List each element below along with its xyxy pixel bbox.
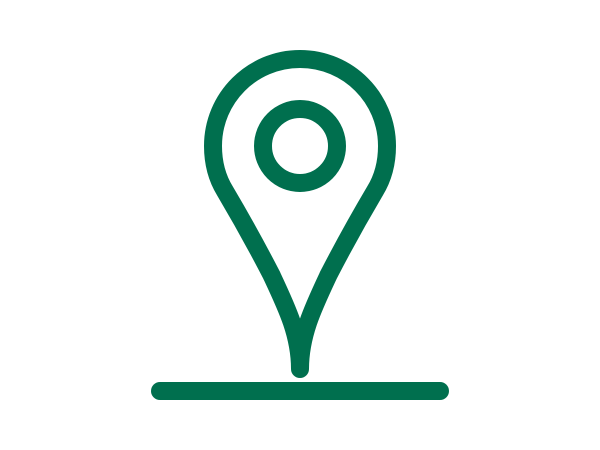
icon: ground line [160, 382, 440, 400]
icon: map pin outline [213, 59, 387, 369]
icon: pin inner circle [263, 109, 337, 183]
